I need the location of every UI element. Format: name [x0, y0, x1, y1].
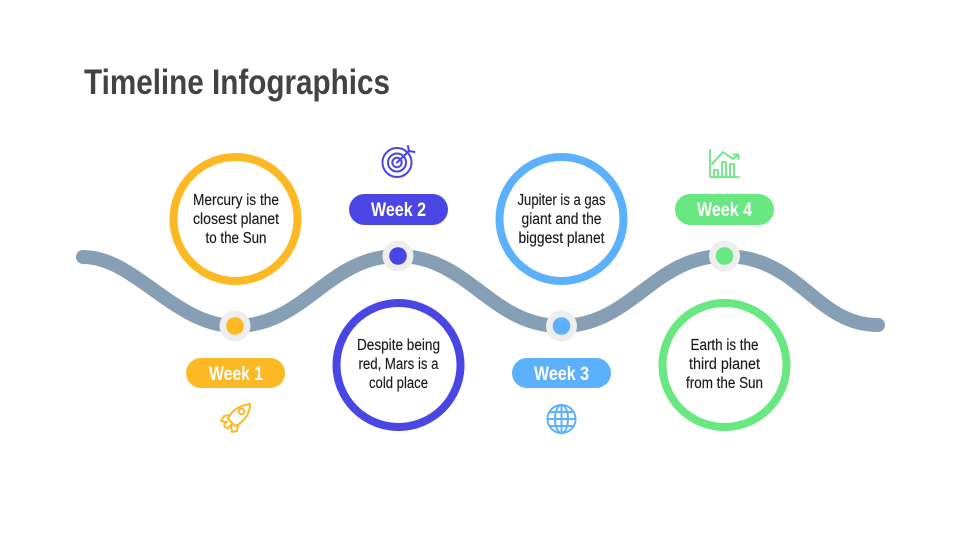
- marker: week 2: [382, 240, 414, 272]
- text: Jupiter: Jupiter is a gas: [518, 192, 606, 209]
- text: Jupiter: [518, 192, 606, 247]
- icon: growth chart: [710, 150, 739, 177]
- circle: Earth: [662, 303, 786, 427]
- week 4 group: [662, 150, 786, 427]
- text: Earth: Earth is the: [690, 337, 758, 354]
- text: Mars: red, Mars is a: [358, 356, 439, 373]
- pill: Week 1: Week 1: [209, 364, 263, 385]
- week 2 group: [336, 146, 460, 427]
- text: Mercury: closest planet: [193, 211, 280, 228]
- text: Jupiter: giant and the: [522, 211, 602, 228]
- marker: week 4: [709, 240, 740, 272]
- icon: rocket: [221, 404, 250, 432]
- text: Earth: third planet: [689, 356, 761, 373]
- pill: Week 3: [512, 358, 611, 388]
- circle: Jupiter: [500, 157, 624, 281]
- pill: Week 4: Week 4: [697, 200, 752, 221]
- week 3 group: [500, 157, 624, 433]
- title: Timeline Infographics: [84, 63, 390, 102]
- pill: Week 1: [186, 358, 285, 388]
- text: Earth: from the Sun: [686, 375, 763, 392]
- icon: target: [382, 146, 414, 177]
- text: Jupiter: biggest planet: [518, 230, 605, 247]
- pill: Week 4: [675, 194, 774, 225]
- text: Mars: cold place: [369, 375, 428, 392]
- text: Mercury: [193, 192, 280, 247]
- text: Mercury: to the Sun: [206, 230, 266, 247]
- text: Mars: Despite being: [357, 337, 440, 354]
- circle: Mars: [336, 303, 460, 427]
- pill: Week 3: Week 3: [534, 364, 589, 385]
- timeline wave path: [83, 256, 878, 326]
- icon: globe: [548, 405, 576, 433]
- circle: Mercury: [174, 157, 298, 281]
- text: Mercury: Mercury is the: [193, 192, 279, 209]
- marker: week 1: [220, 310, 250, 342]
- week 1 group: [174, 157, 298, 432]
- marker: week 3: [546, 310, 577, 342]
- pill: Week 2: Week 2: [371, 200, 426, 221]
- pill: Week 2: [349, 194, 448, 225]
- text: Earth: [686, 337, 763, 392]
- text: Mars: [357, 337, 440, 392]
